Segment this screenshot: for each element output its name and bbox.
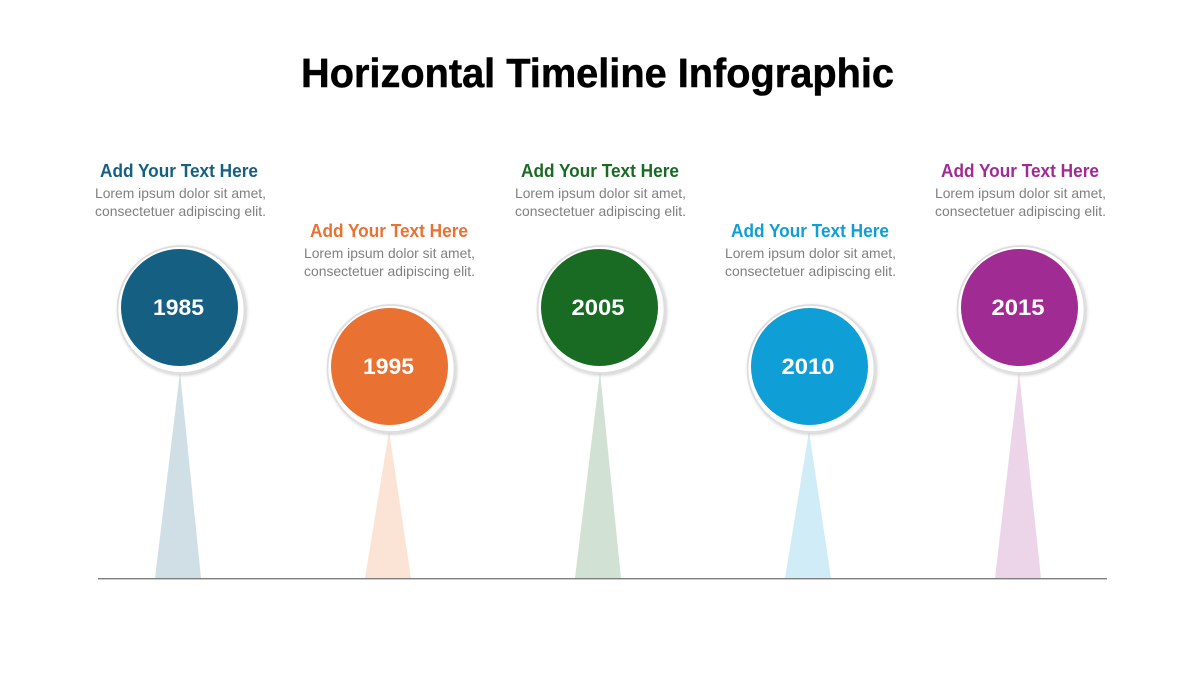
heading 2010: Add Your Text Here: [731, 221, 889, 241]
milestone 1995: consectetuer adipiscing elit.: [304, 263, 475, 279]
milestone 2005: consectetuer adipiscing elit.: [515, 203, 686, 219]
milestone 2015: consectetuer adipiscing elit.: [935, 203, 1106, 219]
badge 2005: [538, 246, 664, 373]
milestone 2005: [515, 161, 686, 578]
pointer 1985: [155, 372, 201, 578]
pointer 1995: [365, 431, 411, 578]
description 1985: Lorem ipsum dolor sit amet,: [95, 185, 266, 201]
milestone 1985: consectetuer adipiscing elit.: [95, 203, 266, 219]
heading 1985: Add Your Text Here: [100, 161, 258, 181]
description 2010: Lorem ipsum dolor sit amet,: [725, 245, 896, 261]
pointer 2005: [575, 372, 621, 578]
badge 2010: [748, 305, 874, 432]
heading 2015: Add Your Text Here: [941, 161, 1099, 181]
baseline: [98, 578, 1107, 579]
milestone 2010: consectetuer adipiscing elit.: [725, 263, 896, 279]
pointer 2015: [995, 372, 1041, 578]
badge 2015: [958, 246, 1084, 373]
badge 2010: 2010: [782, 354, 834, 379]
milestone 2015: [935, 161, 1106, 578]
heading 2005: Add Your Text Here: [521, 161, 679, 181]
badge 1995: [328, 305, 454, 432]
description 1995: Lorem ipsum dolor sit amet,: [304, 245, 475, 261]
badge 1985: [118, 246, 244, 373]
badge 2015: 2015: [992, 295, 1044, 320]
heading 1995: Add Your Text Here: [310, 221, 468, 241]
description 2005: Lorem ipsum dolor sit amet,: [515, 185, 686, 201]
milestone 1995: [304, 221, 475, 578]
milestone 2010: [725, 221, 896, 578]
title: Horizontal Timeline Infographic: [301, 50, 894, 96]
badge 1995: 1995: [363, 354, 414, 379]
description 2015: Lorem ipsum dolor sit amet,: [935, 185, 1106, 201]
pointer 2010: [785, 431, 831, 578]
milestone 1985: [95, 161, 266, 578]
badge 1985: 1985: [153, 295, 204, 320]
badge 2005: 2005: [572, 295, 624, 320]
